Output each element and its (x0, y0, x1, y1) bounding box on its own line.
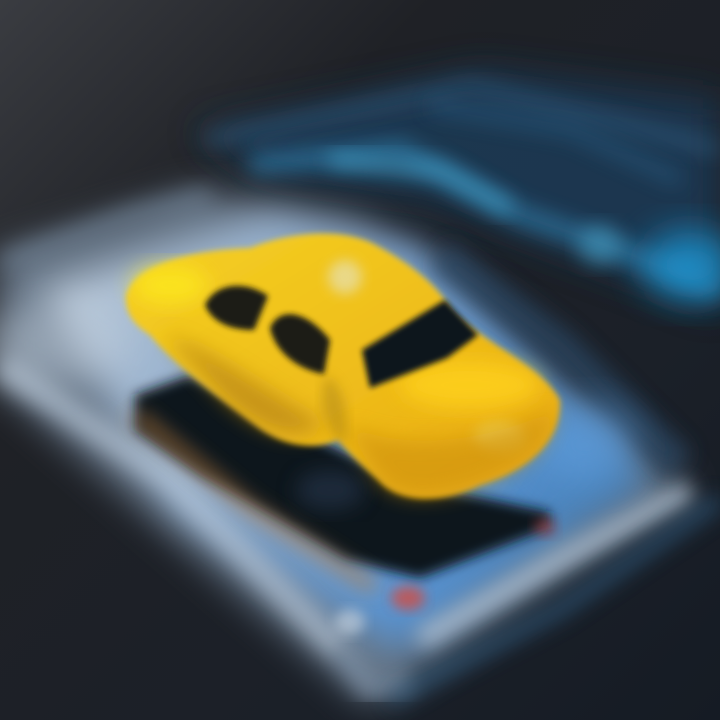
rear window (362, 300, 478, 388)
phone body (0, 190, 720, 705)
taxi body (126, 234, 560, 499)
car shadow (135, 375, 556, 635)
upper blue map glow (195, 70, 720, 310)
taxi darker side panels (345, 410, 555, 496)
taxi (126, 234, 560, 499)
taxi bright highlights (132, 265, 208, 305)
phone light edge (0, 365, 340, 650)
side windows (205, 286, 268, 330)
